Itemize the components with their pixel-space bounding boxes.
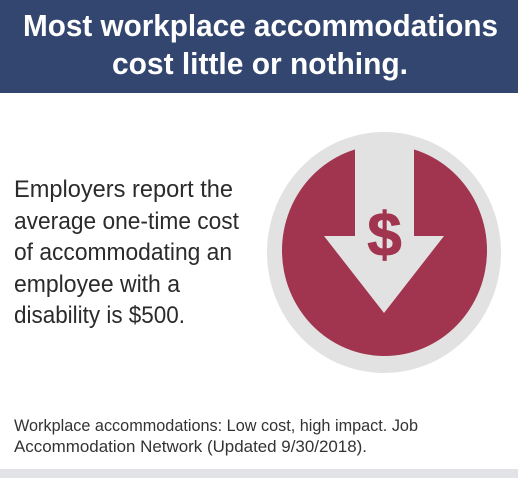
source citation: Workplace accommodations: Low cost, high impact. Job [14, 416, 418, 435]
title: cost little or nothing. [112, 46, 408, 81]
icon: dollar down arrow in circle [267, 132, 501, 373]
footer bar [0, 469, 518, 478]
title: Most workplace accommodations [23, 8, 498, 43]
source citation: Accommodation Network (Updated 9/30/2018). [14, 437, 367, 456]
body text: employee with a [14, 271, 181, 298]
body text: Employers report the [14, 176, 233, 203]
header banner [0, 0, 518, 93]
body text: disability is $500. [14, 302, 185, 329]
icon: dollar sign: $ [367, 201, 402, 270]
body text: average one-time cost [14, 208, 239, 235]
body text: of accommodating an [14, 239, 232, 266]
icon: down arrow [324, 140, 444, 313]
